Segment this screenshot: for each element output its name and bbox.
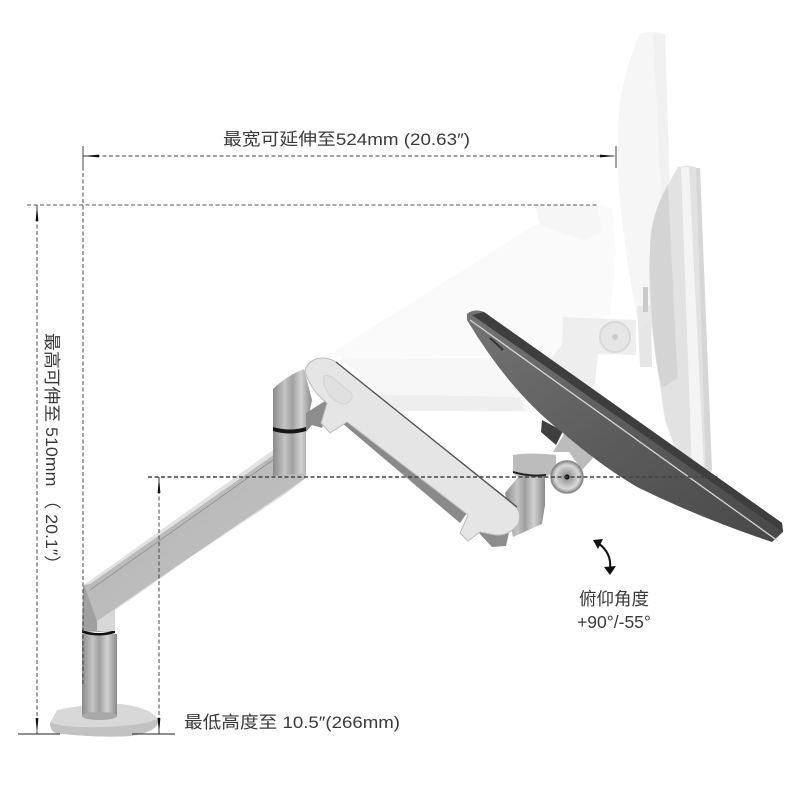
underside hinge xyxy=(478,527,510,547)
label: tilt angle: 俯仰角度 xyxy=(579,589,649,609)
upper arm: white cover xyxy=(305,358,520,541)
tilted monitor mount and knob xyxy=(541,420,593,493)
label: minimum height: 最低高度至 10.5″(266mm) xyxy=(184,713,400,732)
monitor swivel joint xyxy=(505,454,556,537)
label: tilt angle xyxy=(577,589,651,632)
ghost arm: highest position xyxy=(330,205,616,412)
vertical pole: base and column xyxy=(50,586,159,737)
gray underside of upper arm xyxy=(342,422,467,523)
dimension lines xyxy=(18,146,720,734)
lower arm xyxy=(84,450,306,631)
label: maximum reach: 最宽可延伸至524mm (20.63″) xyxy=(223,130,470,149)
upper column xyxy=(82,586,115,632)
label: tilt angle: +90°/-55° xyxy=(577,612,651,632)
lower column xyxy=(82,634,117,716)
ghost monitor: middle position xyxy=(640,166,712,505)
ghost monitor: highest position xyxy=(618,32,676,330)
tilted monitor xyxy=(467,310,783,542)
black ring xyxy=(82,630,115,636)
riser column with ring xyxy=(273,369,330,476)
clamp base xyxy=(50,704,159,737)
ghost swivel joint xyxy=(545,305,652,388)
icon: curved tilt arrow xyxy=(593,539,616,575)
label: maximum height: 最高可伸至 510mm （ 20.1″） xyxy=(42,333,61,573)
